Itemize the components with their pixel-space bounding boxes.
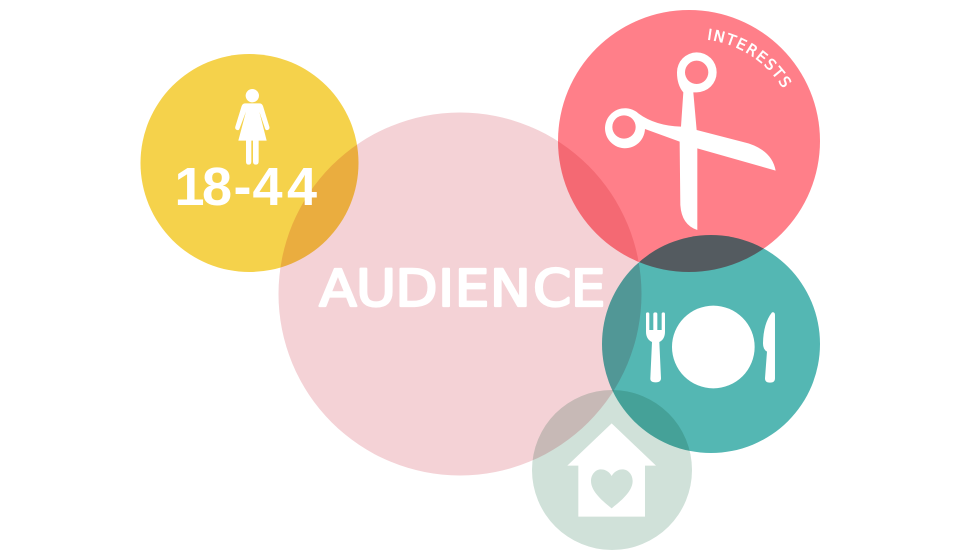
knife [763,312,775,383]
heading: audience: AUDIENCE [319,259,606,318]
circle: food [602,235,820,453]
icon: scissors [605,52,776,230]
icon: place setting [646,306,775,388]
plate [672,306,755,388]
icon: house with heart [567,423,656,517]
age label: 18-44: 18-44 [174,157,317,217]
circle: home [532,390,692,550]
fork [646,312,665,382]
circle: audience [278,112,642,476]
label: interests: INTERESTS [708,28,792,88]
circle: interests [558,10,820,272]
icon: woman [235,89,269,165]
circle: age [140,54,358,272]
